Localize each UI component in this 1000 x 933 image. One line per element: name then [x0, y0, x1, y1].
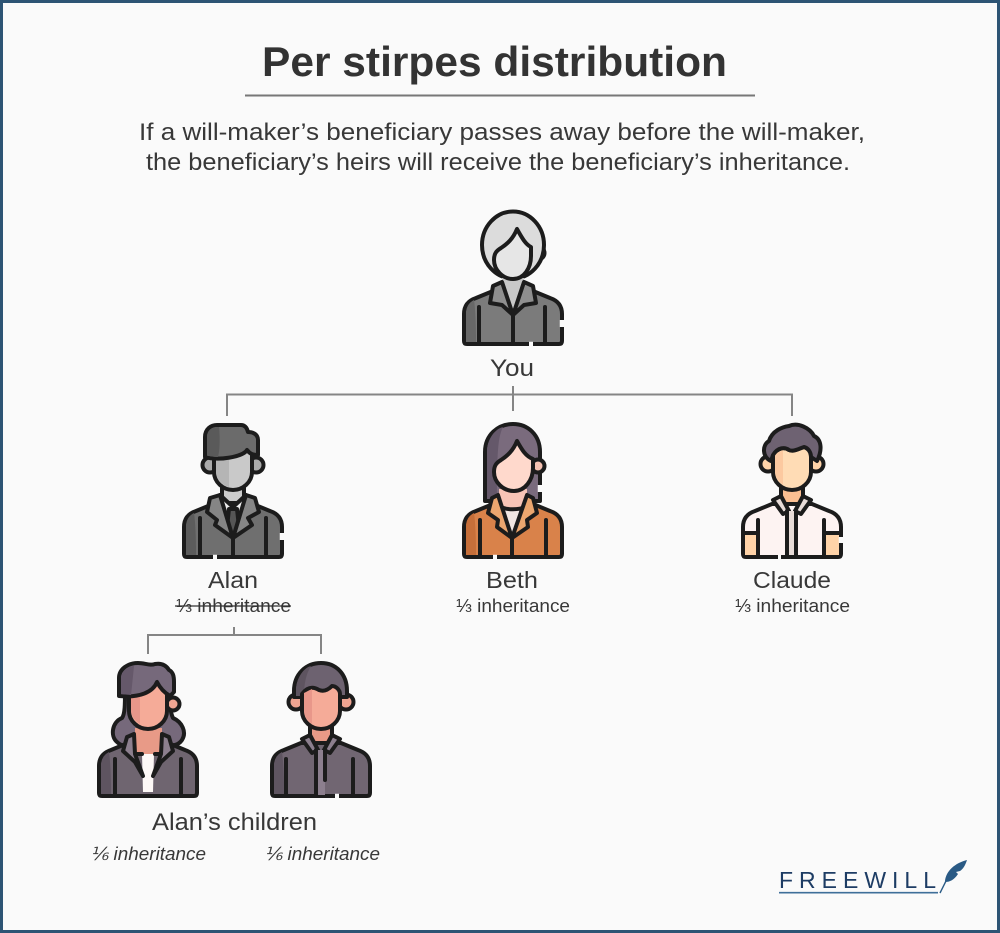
- subtitle text: If a will-maker’s beneficiary passes away before the will-maker,: [139, 119, 865, 146]
- icon: You: [464, 212, 562, 344]
- icon: feather: [940, 860, 967, 893]
- share: Claude: ⅓ inheritance: [735, 596, 850, 616]
- label: You: You: [490, 355, 534, 382]
- subtitle text: the beneficiary’s heirs will receive the beneficiary’s inheritance.: [146, 149, 850, 176]
- label: Alan's children: Alan’s children: [152, 809, 317, 836]
- connector: You to three beneficiaries: [227, 386, 792, 416]
- logo: FreeWill: FREEWILL: [779, 867, 936, 893]
- share: Alan struck through: ⅓ inheritance: [176, 596, 291, 616]
- subtitle text: [139, 119, 865, 176]
- share: first child: ⅙ inheritance: [90, 844, 206, 864]
- label: Alan: [175, 567, 291, 616]
- label: Claude: Claude: [753, 567, 831, 593]
- label: Alan: Alan: [208, 567, 258, 593]
- title: Per stirpes distribution: [262, 38, 727, 85]
- share: second child: ⅙ inheritance: [264, 844, 380, 864]
- label: Beth: Beth: [486, 567, 538, 593]
- icon: Alan: [184, 425, 282, 557]
- logo: FreeWill: [779, 860, 967, 893]
- label: Beth: [456, 567, 570, 616]
- icon: Alan's daughter: [99, 663, 197, 796]
- share: Beth: ⅓ inheritance: [456, 596, 570, 616]
- connector: Alan to children: [148, 627, 321, 654]
- label: Claude: [735, 567, 850, 616]
- icon: Alan's son: [272, 663, 370, 796]
- icon: Beth: [464, 424, 562, 557]
- icon: Claude: [743, 425, 841, 557]
